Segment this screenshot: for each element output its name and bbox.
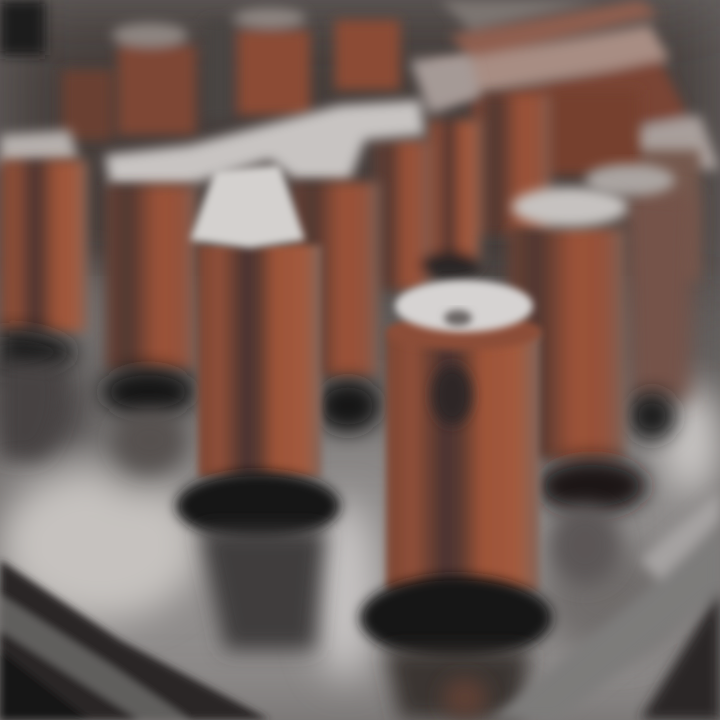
centre column	[176, 165, 340, 650]
foreground dark diagonal stripes, lower left	[0, 560, 270, 720]
far-right column	[585, 164, 695, 440]
mid-right back columns	[375, 90, 700, 290]
front column	[360, 280, 552, 720]
right column	[508, 187, 647, 585]
white plate across the middle tops	[0, 55, 480, 185]
left column	[102, 185, 198, 470]
centre-back column	[292, 182, 380, 432]
top-right stripes	[430, 0, 720, 170]
foreground stripes, lower right	[490, 490, 720, 720]
floor: light and dark reflections	[0, 260, 720, 680]
back row columns	[0, 0, 400, 140]
far-left column	[0, 160, 88, 458]
